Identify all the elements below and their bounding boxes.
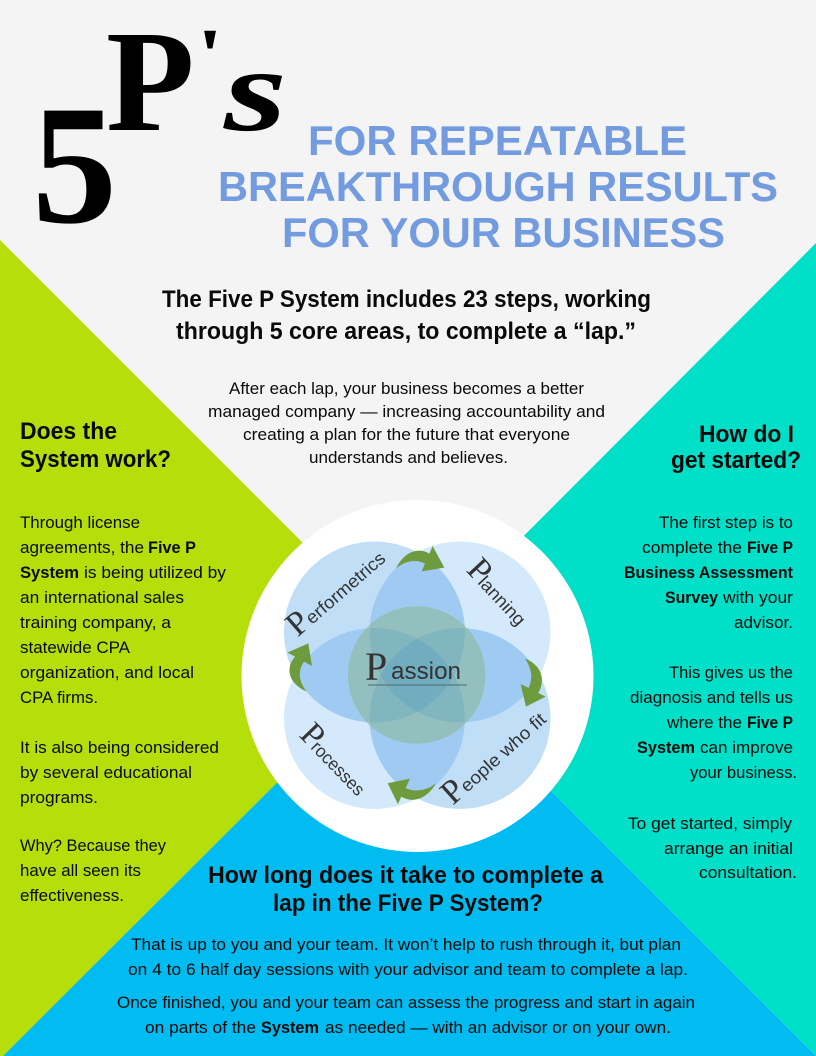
- label: planning: lanning: [474, 572, 530, 630]
- text block: right body: diagnosis and tells us: [630, 688, 793, 707]
- heading: does the system work: System work?: [20, 446, 171, 473]
- text block: bottom body: [117, 935, 695, 1037]
- panel: right teal triangle: [410, 243, 816, 1056]
- title: 5 P's: [32, 2, 287, 259]
- text block: intro: understands and believes.: [309, 448, 508, 467]
- label: people who fit: [433, 699, 553, 812]
- panel: left lime triangle: [0, 240, 410, 1056]
- label: people who fit: P: [433, 772, 472, 812]
- heading: how long does it take: How long does it take to complete a: [208, 862, 604, 889]
- heading: how do i get started: [671, 421, 801, 474]
- heading: five p system summary: [162, 286, 651, 345]
- text block: left body: Through license: [20, 513, 140, 532]
- title: 5 P's: ': [197, 14, 223, 97]
- arrow: right: [521, 659, 546, 707]
- text block: intro: creating a plan for the future that everyone: [243, 425, 570, 444]
- text block: right body: This gives us the: [669, 663, 793, 682]
- text block: intro: [208, 379, 605, 467]
- text block: left body: Five P: [148, 538, 196, 557]
- text block: bottom body: as needed — with an advisor or on your own.: [325, 1018, 671, 1037]
- text block: left body: effectiveness.: [20, 886, 124, 905]
- arrow: bottom: [388, 779, 436, 804]
- label: performetrics: [279, 538, 392, 644]
- text block: left body: organization, and local: [20, 663, 194, 682]
- text block: left body: Why? Because they: [20, 836, 166, 855]
- center circle: passion: [348, 606, 486, 744]
- heading: does the system work: Does the: [20, 418, 117, 445]
- heading: for repeatable breakthrough results: [218, 117, 778, 256]
- text block: bottom body: on 4 to 6 half day sessions with your advisor and team to complete a lap.: [128, 960, 688, 979]
- label: planning: [460, 551, 539, 632]
- text block: bottom body: System: [261, 1018, 319, 1037]
- label: passion: [365, 644, 467, 689]
- heading: for repeatable breakthrough results: FOR REPEATABLE: [308, 117, 687, 164]
- text block: left body: statewide CPA: [20, 638, 131, 657]
- label: processes: [292, 716, 378, 802]
- text block: bottom body: That is up to you and your team. It won’t help to rush through it, but plan: [131, 935, 681, 954]
- label: processes: rocesses: [307, 737, 369, 800]
- text block: bottom body: on parts of the: [145, 1018, 256, 1037]
- text block: right body: complete the: [642, 538, 742, 557]
- text block: left body: have all seen its: [20, 861, 141, 880]
- text block: right body: with your: [722, 588, 793, 607]
- text block: left body: System: [20, 563, 79, 582]
- text block: right body: Five P: [747, 713, 793, 732]
- heading: how long does it take: lap in the Five P System?: [273, 890, 543, 917]
- text block: right body: Business Assessment: [624, 563, 793, 582]
- text block: right body: The first step is to: [659, 513, 793, 532]
- label: passion: assion: [391, 658, 461, 685]
- label: people who fit: eople who fit: [456, 709, 550, 796]
- label: performetrics: erformetrics: [302, 548, 389, 628]
- text block: intro: managed company — increasing accountability and: [208, 402, 605, 421]
- heading: how do i get started: get started?: [671, 447, 801, 474]
- heading: five p system summary: The Five P System includes 23 steps, working: [162, 286, 651, 313]
- text block: left body: agreements, the: [20, 538, 144, 557]
- text block: left body: is being utilized by: [84, 563, 227, 582]
- text block: left body: CPA firms.: [20, 688, 98, 707]
- text block: right body: can improve: [700, 738, 793, 757]
- heading: how long does it take: [208, 862, 604, 917]
- text block: right body: arrange an initial: [664, 839, 793, 858]
- text block: left body: [20, 513, 227, 905]
- text block: right body: advisor.: [734, 613, 793, 632]
- heading: five p system summary: through 5 core areas, to complete a “lap.”: [176, 318, 636, 345]
- label: performetrics: P: [279, 603, 317, 644]
- text block: right body: Survey: [665, 588, 719, 607]
- text block: left body: an international sales: [20, 588, 184, 607]
- title: 5 P's: 5: [32, 71, 117, 259]
- text block: left body: It is also being considered: [20, 738, 219, 757]
- arrow: left: [287, 643, 312, 692]
- text block: right body: consultation.: [699, 863, 797, 882]
- label: planning: P: [460, 551, 500, 590]
- text block: right body: To get started, simply: [628, 814, 793, 833]
- petals: [284, 542, 550, 809]
- arrow: top: [396, 546, 444, 571]
- text block: right body: System: [637, 738, 695, 757]
- heading: how do i get started: How do I: [699, 421, 794, 448]
- heading: for repeatable breakthrough results: BREAKTHROUGH RESULTS: [218, 163, 778, 210]
- title: 5 P's: s: [223, 24, 287, 156]
- heading: for repeatable breakthrough results: FOR YOUR BUSINESS: [282, 209, 725, 256]
- title: 5 P's: P: [106, 2, 195, 162]
- text block: right body: your business.: [690, 763, 797, 782]
- text block: right body: where the: [666, 713, 742, 732]
- diagram: white disc with five p venn: [242, 500, 594, 852]
- arrows: [287, 546, 546, 804]
- label: processes: P: [292, 716, 332, 755]
- text block: right body: Five P: [747, 538, 793, 557]
- text block: left body: training company, a: [20, 613, 172, 632]
- text block: left body: by several educational: [20, 763, 192, 782]
- text block: bottom body: Once finished, you and your team can assess the progress and start in again: [117, 993, 695, 1012]
- panel: bottom blue triangle: [0, 650, 816, 1056]
- text block: intro: After each lap, your business becomes a better: [229, 379, 584, 398]
- label: passion: P: [365, 644, 387, 689]
- text block: right body: [624, 513, 797, 882]
- text block: left body: programs.: [20, 788, 98, 807]
- heading: does the system work: [20, 418, 171, 473]
